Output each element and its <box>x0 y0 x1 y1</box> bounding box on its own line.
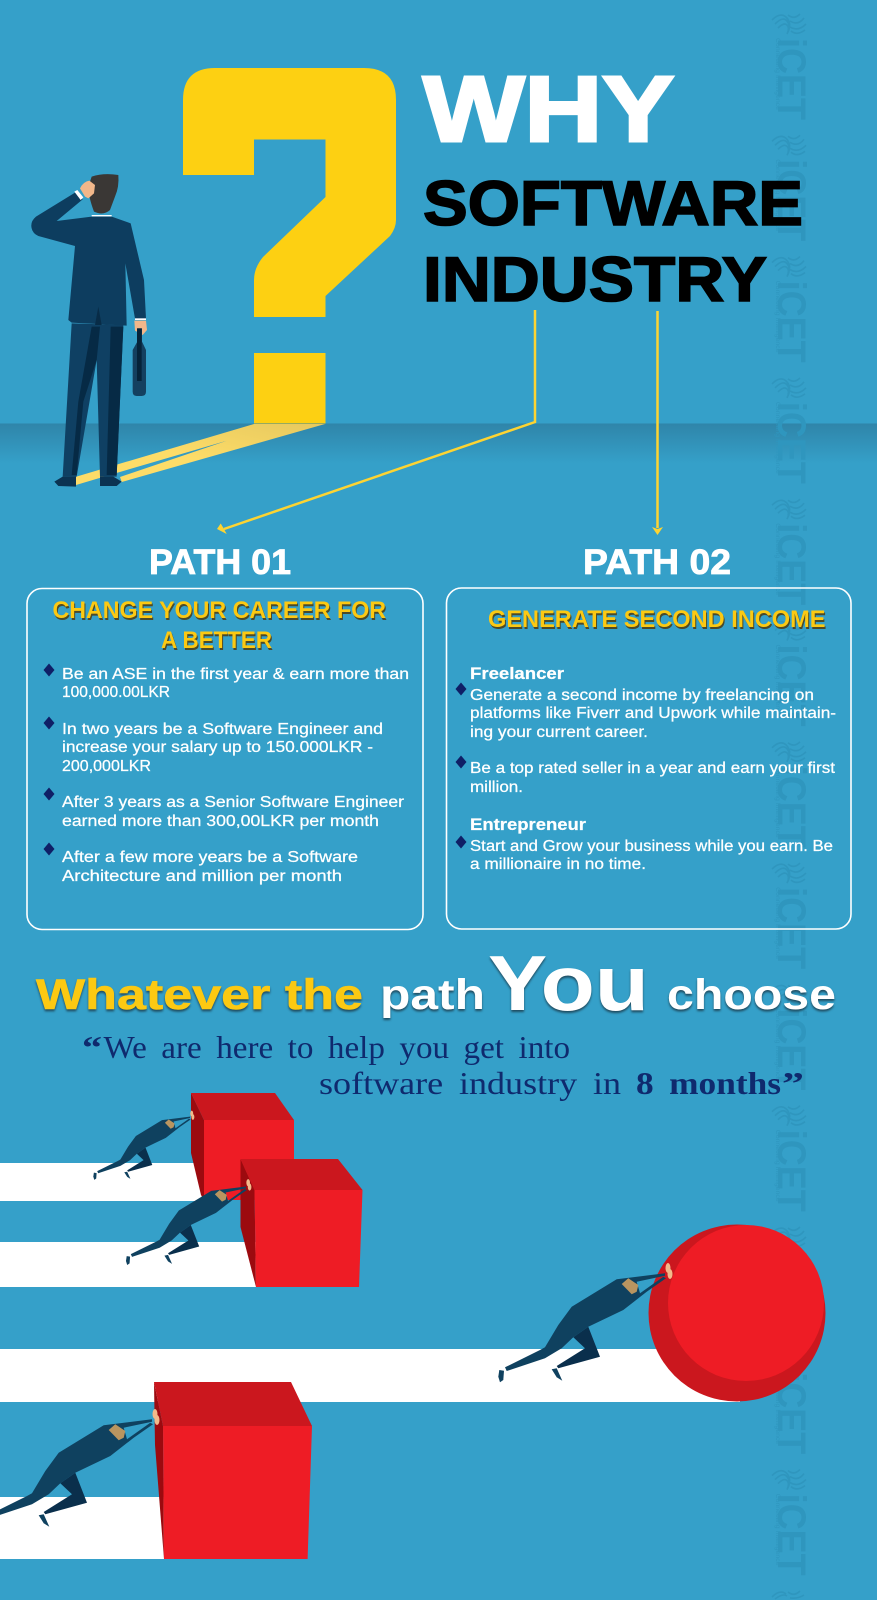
bullet: Software Engineer in two years: 200,000LKR <box>62 758 151 775</box>
bullet: Software Engineer in two years: In two years be a Software Engineer and <box>62 721 383 738</box>
quote: we are here to help: We are here to help you get into <box>104 1029 570 1065</box>
road: top white stripe <box>0 1163 205 1201</box>
panel heading: change your career <box>52 597 386 654</box>
arrow: title to path 01 <box>217 310 535 534</box>
panel heading: generate second income: GENERATE SECOND INCOME <box>488 606 826 633</box>
bullet: freelancing platforms <box>456 682 836 741</box>
bullet: Software Architecture <box>44 842 358 885</box>
heading: PATH 01: PATH 01 <box>149 543 291 582</box>
title: WHY SOFTWARE INDUSTRY: INDUSTRY <box>423 245 767 315</box>
slogan: whatever the path you choose: choose <box>667 971 836 1019</box>
watermark: repeated iCET logo: Connecting Intelligence <box>774 1008 780 1081</box>
subheading: Freelancer: Freelancer <box>470 664 564 683</box>
watermark: repeated iCET logo <box>769 14 813 1599</box>
subheading: Entrepreneur: Entrepreneur <box>470 815 586 834</box>
bullet: freelancing platforms: Generate a second income by freelancing on <box>470 687 814 704</box>
watermark: repeated iCET logo: Connecting Intelligence <box>774 887 780 960</box>
bullet: Senior Software Engineer after 3 years: After 3 years as a Senior Software Engineer <box>62 794 404 811</box>
quote: we are here to help: ” <box>782 1065 804 1101</box>
arrow: title to path 02 <box>652 311 663 535</box>
slogan: whatever the path you choose: You <box>488 939 649 1027</box>
watermark: repeated iCET logo: Connecting Intelligence <box>774 1251 780 1324</box>
watermark: repeated iCET logo: iCET <box>769 523 813 605</box>
watermark: repeated iCET logo: Connecting Intelligence <box>774 1494 780 1566</box>
title: WHY SOFTWARE INDUSTRY: SOFTWARE <box>423 169 803 239</box>
road: third white stripe <box>0 1349 740 1402</box>
watermark: repeated iCET logo: Connecting Intelligence <box>774 402 780 475</box>
watermark: repeated iCET logo: iCET <box>769 281 813 363</box>
road: bottom white stripe <box>0 1497 166 1559</box>
watermark: repeated iCET logo: iCET <box>769 644 813 726</box>
bullet: freelancing platforms: ing your current career. <box>470 724 648 741</box>
watermark: repeated iCET logo: Connecting Intelligence <box>774 281 780 353</box>
bullet: ASE first year <box>44 664 409 701</box>
figure: man pushing top block <box>93 1111 194 1180</box>
ball: large red sphere <box>648 1224 826 1402</box>
title: WHY SOFTWARE INDUSTRY <box>423 57 803 315</box>
watermark: repeated iCET logo: iCET <box>769 766 813 848</box>
watermark: repeated iCET logo: iCET <box>769 38 813 120</box>
watermark: repeated iCET logo: iCET <box>769 887 813 969</box>
watermark: repeated iCET logo: iCET <box>769 1372 813 1454</box>
icon: large yellow question mark with light shadow <box>76 68 396 485</box>
title: WHY SOFTWARE INDUSTRY: WHY <box>423 57 674 161</box>
watermark: repeated iCET logo: Connecting Intelligence <box>774 1372 780 1445</box>
cube: second red block <box>240 1159 362 1287</box>
slogan: whatever the path you choose <box>36 939 836 1027</box>
figure: man pushing ball <box>498 1263 672 1382</box>
bullet: Software Engineer in two years: increase your salary up to 150.000LKR - <box>62 739 373 756</box>
panel heading: change your career: A BETTER <box>161 627 272 654</box>
watermark: repeated iCET logo: iCET <box>769 1251 813 1333</box>
watermark: repeated iCET logo: Connecting Intelligence <box>774 38 780 111</box>
watermark: repeated iCET logo: iCET <box>769 1008 813 1090</box>
figure: man pushing bottom block <box>0 1409 160 1528</box>
quote: we are here to help: 8 months <box>636 1065 781 1101</box>
watermark: repeated iCET logo: Connecting Intelligence <box>774 1130 780 1202</box>
bullet: freelancing platforms: platforms like Fiverr and Upwork while maintain- <box>470 705 836 722</box>
bullet: top rated seller: Be a top rated seller in a year and earn your first <box>470 760 836 777</box>
slogan: whatever the path you choose: Whatever the <box>36 971 363 1019</box>
cube: top red block <box>191 1093 294 1200</box>
bullet: ASE first year: Be an ASE in the first year & earn more than <box>62 666 409 683</box>
panel: path 01 career change <box>27 588 423 930</box>
watermark: repeated iCET logo: Connecting Intelligence <box>774 766 780 839</box>
quote: we are here to help <box>82 1029 804 1101</box>
cube: bottom red block <box>154 1382 312 1559</box>
road: second white stripe <box>0 1242 256 1287</box>
quote: we are here to help: “ <box>82 1029 102 1065</box>
bullet: grow your business: Start and Grow your business while you earn. Be <box>470 838 833 855</box>
watermark: repeated iCET logo: Connecting Intelligence <box>774 644 780 717</box>
bullet: grow your business: a millionaire in no time. <box>470 856 646 873</box>
bullet: ASE first year: 100,000.00LKR <box>62 684 170 701</box>
heading: PATH 02: PATH 02 <box>583 543 731 582</box>
bullet: Software Architecture: Architecture and million per month <box>62 868 342 885</box>
panel: path 02 second income <box>446 588 851 929</box>
bullet: Software Engineer in two years <box>44 716 383 775</box>
bullet: top rated seller <box>456 756 836 796</box>
watermark: repeated iCET logo: iCET <box>769 402 813 484</box>
figure: man pushing second block <box>126 1179 251 1265</box>
floor band <box>0 424 877 464</box>
bullet: grow your business <box>456 836 833 873</box>
watermark: repeated iCET logo: Connecting Intelligence <box>774 159 780 232</box>
bullet: Software Architecture: After a few more years be a Software <box>62 849 358 866</box>
figure: businessman in suit seen from behind <box>31 174 147 487</box>
watermark: repeated iCET logo: iCET <box>769 1130 813 1212</box>
slogan: whatever the path you choose: path <box>380 971 485 1019</box>
bullet: top rated seller: million. <box>470 779 523 796</box>
watermark: repeated iCET logo: iCET <box>769 1494 813 1576</box>
bullet: Senior Software Engineer after 3 years <box>44 788 404 830</box>
watermark: repeated iCET logo: Connecting Intelligence <box>774 523 780 596</box>
quote: we are here to help: software industry in <box>319 1065 621 1101</box>
panel heading: change your career: CHANGE YOUR CAREER FOR <box>52 597 386 624</box>
watermark: repeated iCET logo: iCET <box>769 159 813 241</box>
bullet: Senior Software Engineer after 3 years: earned more than 300,00LKR per month <box>62 813 379 830</box>
